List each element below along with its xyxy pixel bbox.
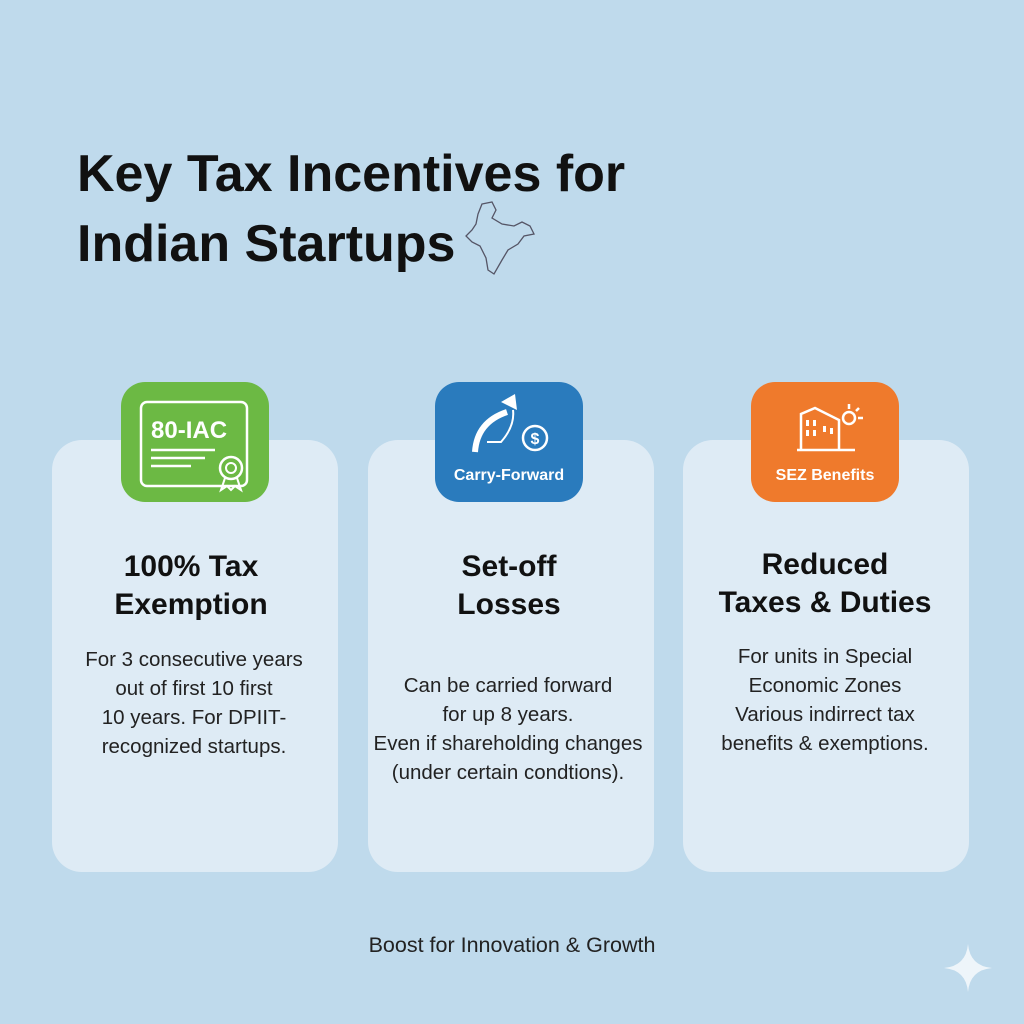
text 1: recognized startups. [102, 735, 286, 758]
text 1: out of first 10 first [115, 677, 273, 700]
title: Key Tax Incentives for [77, 145, 625, 203]
text 3: Economic Zones [749, 674, 901, 697]
text 2 [374, 674, 642, 784]
text 1: 10 years. For DPIIT- [102, 706, 286, 729]
icon: carry-forward [435, 382, 583, 502]
text 3 [721, 645, 929, 755]
text 2: Can be carried forward [404, 674, 612, 697]
icon: carry-forward: $ [531, 431, 540, 448]
text 1: For 3 consecutive years [85, 648, 303, 671]
text 3: For units in Special [738, 645, 912, 668]
icon: sparkle [944, 944, 992, 992]
icon: SEZ benefits: SEZ Benefits [776, 467, 874, 484]
heading 2 [457, 550, 561, 621]
heading 3 [718, 548, 931, 619]
card 1 [52, 440, 338, 872]
footer: Boost for Innovation & Growth [369, 933, 655, 957]
card 2 [368, 440, 654, 872]
card 3 [683, 440, 969, 872]
heading 3: Taxes & Duties [719, 586, 931, 619]
heading 2: Losses [457, 588, 561, 621]
icon: india map [465, 201, 535, 275]
text 2: Even if shareholding changes [374, 732, 642, 755]
text 2: (under certain condtions). [392, 761, 624, 784]
text 1 [85, 648, 303, 758]
heading 1: 100% Tax [124, 550, 258, 583]
heading 1: Exemption [114, 588, 268, 621]
text 3: benefits & exemptions. [721, 732, 929, 755]
text 2: for up 8 years. [442, 703, 574, 726]
heading 1 [114, 550, 268, 621]
heading 3: Reduced [762, 548, 888, 581]
icon: carry-forward: Carry-Forward [454, 467, 564, 484]
text 3: Various indirrect tax [735, 703, 915, 726]
icon: 80-IAC certificate [121, 382, 269, 502]
title [77, 145, 625, 273]
title: Indian Startups [77, 215, 455, 273]
heading 2: Set-off [462, 550, 556, 583]
icon: 80-IAC certificate: 80-IAC [151, 417, 227, 444]
icon: SEZ benefits [751, 382, 899, 502]
